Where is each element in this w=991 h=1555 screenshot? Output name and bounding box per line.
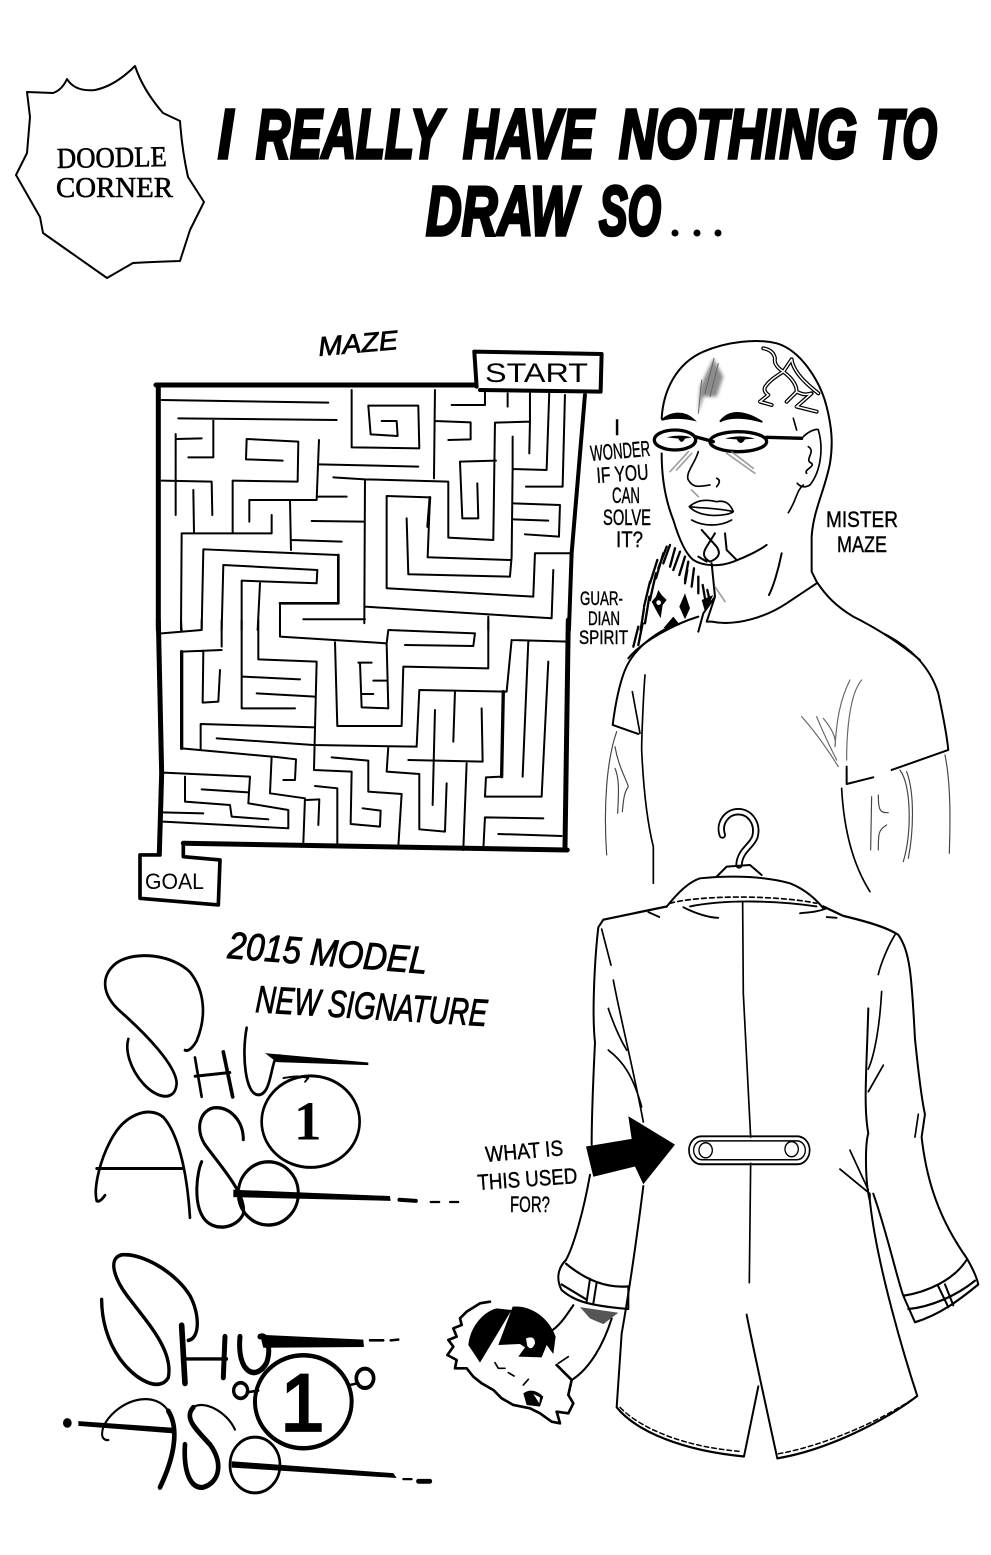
left cuff and forearm [550,1260,628,1379]
signature heading: NEW SIGNATURE [254,979,489,1035]
badge: doodle corner: CORNER [56,172,174,204]
speech: i wonder if you can solve it: I [614,415,620,440]
label: guardian spirit [579,589,628,649]
speech: i wonder if you can solve it [589,415,651,552]
icon: coat on hanger [550,812,978,1458]
maze label: MAZE [317,325,400,362]
forehead shading [698,358,723,413]
title: DRAW [426,172,581,250]
back strap [689,1136,810,1164]
speech: i wonder if you can solve it: IF YOU [596,459,649,488]
label: guardian spirit: DIAN [588,609,620,630]
cheek shading [670,452,755,602]
maze [140,352,602,905]
glasses [654,430,802,452]
title: I [218,95,234,173]
title: HAVE [463,95,596,173]
head and neck [628,341,920,660]
label: mister maze: MAZE [837,532,887,557]
label: mister maze: MISTER [826,507,898,532]
speech: i wonder if you can solve it: WONDER [589,436,651,466]
start label: START [485,358,588,388]
first signature: 1 [294,1090,321,1152]
badge: doodle corner: DOODLE [57,141,167,175]
coat body [550,901,978,1458]
label: what is this used for: WHAT IS [484,1135,564,1167]
second signature [63,1255,430,1493]
lips [689,500,733,525]
second signature: 1 [281,1357,324,1448]
character: mister maze [605,341,950,892]
goal label: GOAL [145,869,204,894]
title: SO [599,172,661,250]
speech: i wonder if you can solve it: SOLVE [603,505,651,530]
guardian spirit creature [633,545,713,647]
maze lower half [140,620,568,905]
label: what is this used for: FOR? [510,1192,550,1217]
hanger [667,812,823,908]
label: mister maze [826,507,898,557]
title: REALLY [256,95,446,173]
signature heading: 2015 MODEL [225,925,429,983]
arrow [586,1116,675,1184]
title [218,95,937,250]
head maze pattern [760,348,818,412]
label: what is this used for: THIS USED [477,1163,578,1195]
icon: severed head [447,1302,573,1423]
t-shirt and arms [605,627,950,892]
speech: i wonder if you can solve it: IT? [616,527,643,552]
badge: doodle corner [16,66,204,278]
label: guardian spirit: GUAR- [580,589,623,610]
maze upper half [156,352,602,630]
signature heading [225,925,489,1035]
title: NOTHING [619,95,857,173]
label: what is this used for [477,1135,578,1217]
nose [688,452,719,487]
title: TO [876,95,937,173]
goatee [698,530,737,562]
speech: i wonder if you can solve it: CAN [612,483,640,508]
first signature [96,956,458,1227]
label: guardian spirit: SPIRIT [579,628,628,649]
eyebrows [662,413,762,422]
